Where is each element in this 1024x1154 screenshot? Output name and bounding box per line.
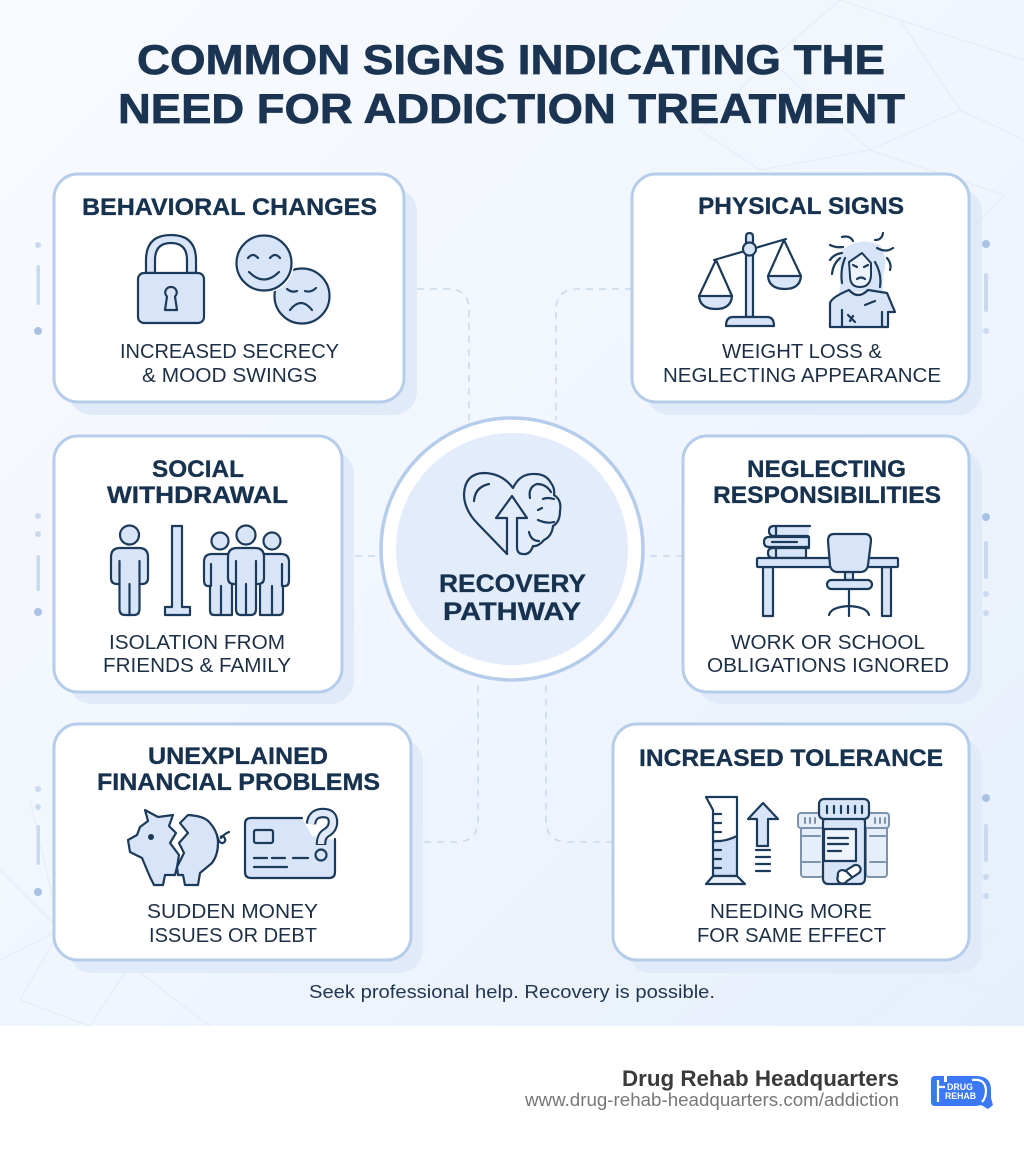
icon: pill bottles — [798, 799, 889, 884]
panel: behavioral changes — [54, 174, 417, 415]
panel: social withdrawal — [54, 436, 354, 704]
description: obligations: OBLIGATIONS IGNORED — [707, 654, 949, 677]
heading: physical signs: PHYSICAL SIGNS — [698, 193, 904, 220]
description: needing more — [697, 900, 886, 947]
title — [118, 36, 905, 132]
heading: behavioral changes: BEHAVIORAL CHANGES — [82, 194, 377, 221]
description: needing more: FOR SAME EFFECT — [697, 924, 886, 947]
footer brand text — [524, 1066, 899, 1110]
description: money issues: SUDDEN MONEY — [147, 900, 318, 923]
icon: broken piggy bank — [128, 810, 229, 885]
icon: balance scale — [699, 233, 801, 326]
title: NEED FOR ADDICTION TREATMENT — [118, 85, 905, 132]
panel: unexplained financial problems — [54, 724, 423, 973]
icon: isolated person — [111, 526, 148, 615]
description: needing more: NEEDING MORE — [710, 900, 872, 923]
description: isolation — [103, 631, 291, 677]
description: weight loss and appearance: NEGLECTING APPEARANCE — [663, 364, 941, 387]
heading: neglecting responsibilities — [713, 456, 941, 509]
connector lines — [342, 289, 683, 842]
icon: padlock — [138, 235, 204, 323]
heading: increased tolerance: INCREASED TOLERANCE — [639, 745, 943, 772]
side accents left — [34, 242, 42, 896]
footer brand text: Drug Rehab Headquarters — [622, 1066, 899, 1091]
description: weight loss and appearance — [663, 340, 941, 387]
footer brand text: www.drug-rehab-headquarters.com/addiction — [524, 1089, 899, 1110]
icon: credit card with question mark — [245, 813, 335, 878]
heading: social withdrawal — [107, 456, 288, 509]
side accents right — [982, 240, 990, 899]
heading: neglecting responsibilities: NEGLECTING — [747, 456, 906, 483]
description: money issues: ISSUES OR DEBT — [149, 924, 317, 947]
logo: HQ badge: REHAB — [945, 1091, 976, 1102]
heading: unexplained financial problems: UNEXPLAINED — [148, 743, 328, 770]
icon: barrier — [165, 526, 190, 615]
icon: desk with books and chair — [757, 526, 898, 616]
icon: dishevelled person — [830, 233, 895, 327]
panel: increased tolerance — [613, 724, 982, 973]
closing message: Seek professional help. Recovery is possible. — [309, 981, 715, 1002]
icon: group of people — [204, 526, 289, 615]
description: obligations — [707, 631, 949, 677]
description: secrecy and mood swings: & MOOD SWINGS — [142, 364, 317, 387]
label: recovery pathway — [439, 570, 586, 626]
description: obligations: WORK OR SCHOOL — [731, 631, 925, 654]
heading: social withdrawal: SOCIAL — [152, 456, 244, 483]
icon: measuring cylinder — [706, 797, 745, 884]
panel: neglecting responsibilities — [683, 436, 982, 704]
description: secrecy and mood swings — [120, 340, 339, 387]
description: secrecy and mood swings: INCREASED SECRECY — [120, 340, 339, 363]
panel: physical signs — [632, 174, 982, 415]
description: weight loss and appearance: WEIGHT LOSS & — [722, 340, 882, 363]
description: isolation: FRIENDS & FAMILY — [103, 654, 291, 677]
icon: mood faces — [234, 233, 330, 324]
heading: unexplained financial problems: FINANCIAL PROBLEMS — [97, 769, 380, 796]
heading: neglecting responsibilities: RESPONSIBILITIES — [713, 482, 941, 509]
icon: heart and brain with arrow — [464, 473, 560, 554]
heading: social withdrawal: WITHDRAWAL — [107, 482, 288, 509]
title: COMMON SIGNS INDICATING THE — [137, 36, 885, 83]
logo: HQ badge: DRUG — [947, 1082, 973, 1093]
central hub: recovery pathway — [381, 418, 643, 680]
description: isolation: ISOLATION FROM — [109, 631, 285, 654]
icon: up arrow — [748, 803, 778, 871]
label: recovery pathway: PATHWAY — [443, 598, 581, 626]
label: recovery pathway: RECOVERY — [439, 570, 586, 598]
heading: unexplained financial problems — [97, 743, 380, 796]
description: money issues — [147, 900, 318, 947]
logo: HQ badge — [931, 1076, 993, 1109]
